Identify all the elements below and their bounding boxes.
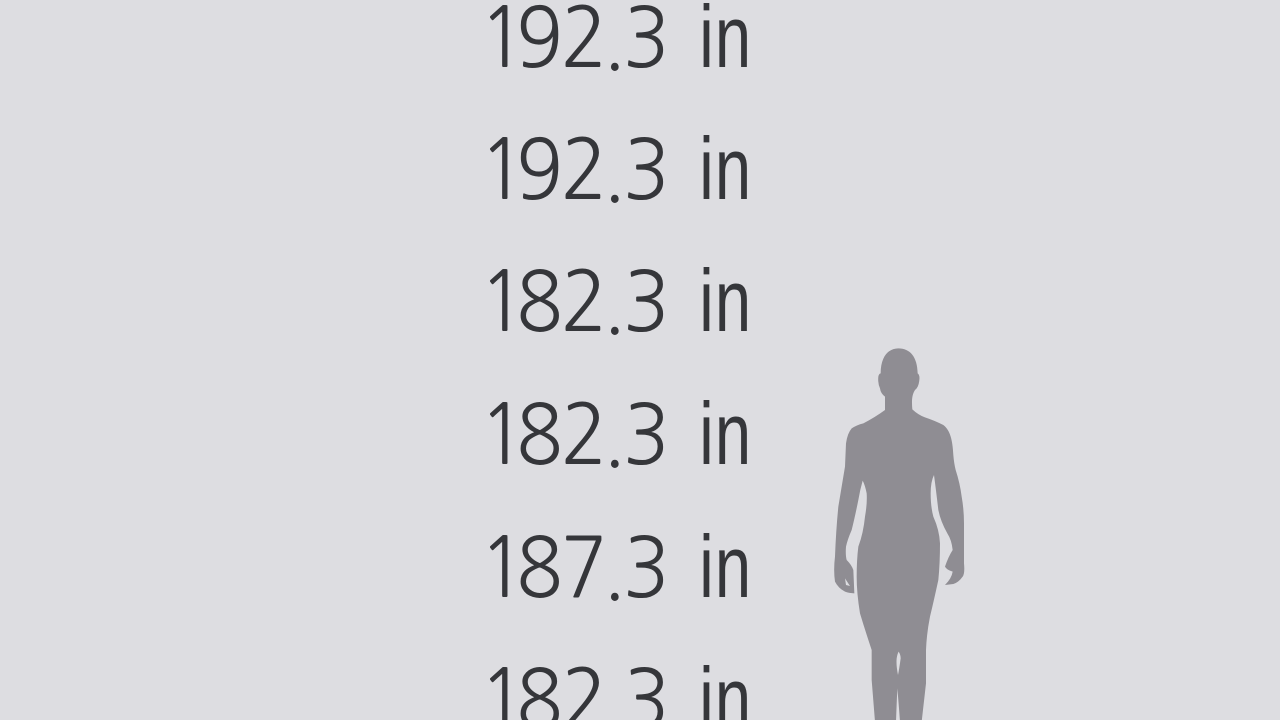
- height value list: [479, 0, 751, 720]
- height value: 182.3 in: [479, 651, 751, 720]
- height value: 182.3 in: [479, 386, 751, 483]
- icon: human silhouette: [834, 348, 964, 720]
- height value: 187.3 in: 187.3: [479, 526, 670, 609]
- height value: 187.3 in: in: [699, 519, 751, 616]
- height value: 182.3 in: in: [699, 253, 751, 350]
- height value: 192.3 in: [479, 0, 751, 86]
- height value: 192.3 in: in: [699, 121, 751, 218]
- height value: 187.3 in: [479, 519, 751, 616]
- height value: 182.3 in: in: [699, 386, 751, 483]
- height value: 182.3 in: [479, 253, 751, 350]
- height value: 192.3 in: [479, 121, 751, 218]
- height value: 182.3 in: 182.3: [479, 260, 670, 343]
- height value: 182.3 in: 182.3: [479, 393, 670, 476]
- height value: 192.3 in: 192.3: [479, 128, 670, 211]
